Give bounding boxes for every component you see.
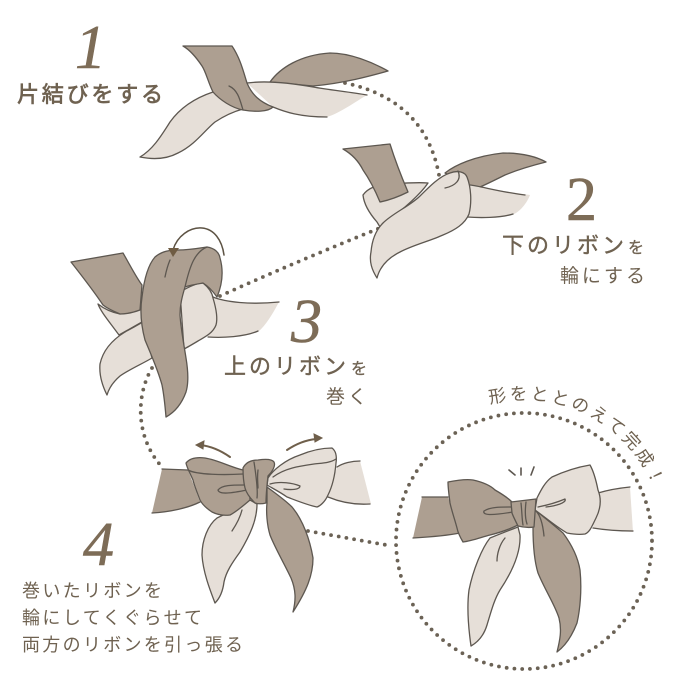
step 4 number: 4 xyxy=(83,511,114,579)
step 4 caption: 輪にしてくぐらせて xyxy=(22,608,202,628)
step 1 caption: 片結びをする xyxy=(17,82,163,107)
step 4 caption: 両方のリボンを引っ張る xyxy=(22,635,243,655)
dotted connector: step 1 to step 2 xyxy=(345,83,439,175)
icon: sparkle lines above bow xyxy=(509,467,534,475)
step 3 caption: 巻く xyxy=(326,386,367,408)
step 1 number: 1 xyxy=(75,14,106,82)
illustration: step 4 bow being tightened xyxy=(152,448,371,612)
step 4 caption xyxy=(22,581,243,655)
step 3 caption: を xyxy=(351,360,367,378)
step 2 number: 2 xyxy=(566,166,597,234)
dotted connector: step 2 to step 3 xyxy=(220,228,380,296)
step 3 caption: 上のリボン xyxy=(224,354,346,379)
illustration: step 2 lower ribbon loop xyxy=(343,144,546,278)
step 2 caption: を xyxy=(628,239,644,257)
step 3 caption xyxy=(224,354,367,408)
curved caption: finished: 形をととのえて完成！ xyxy=(488,386,662,479)
arrow: wrap over the loop xyxy=(168,228,224,257)
step 2 caption: 輪にする xyxy=(560,265,645,287)
illustration: step 3 upper ribbon wrap xyxy=(71,247,279,417)
illustration: finished bow xyxy=(413,465,633,652)
step 2 caption xyxy=(502,233,645,287)
step 3 number: 3 xyxy=(290,288,322,356)
arrow: pull left xyxy=(196,441,230,457)
step 4 caption: 巻いたリボンを xyxy=(22,581,162,601)
illustration: step 1 single knot xyxy=(140,46,388,158)
dotted connector: step 3 to step 4 xyxy=(141,368,162,467)
dotted circle: finished bow frame xyxy=(396,413,652,669)
dotted connector: step 4 to finished bow xyxy=(308,531,392,546)
arrow: pull right xyxy=(287,434,322,450)
step 2 caption: 下のリボン xyxy=(502,233,624,258)
